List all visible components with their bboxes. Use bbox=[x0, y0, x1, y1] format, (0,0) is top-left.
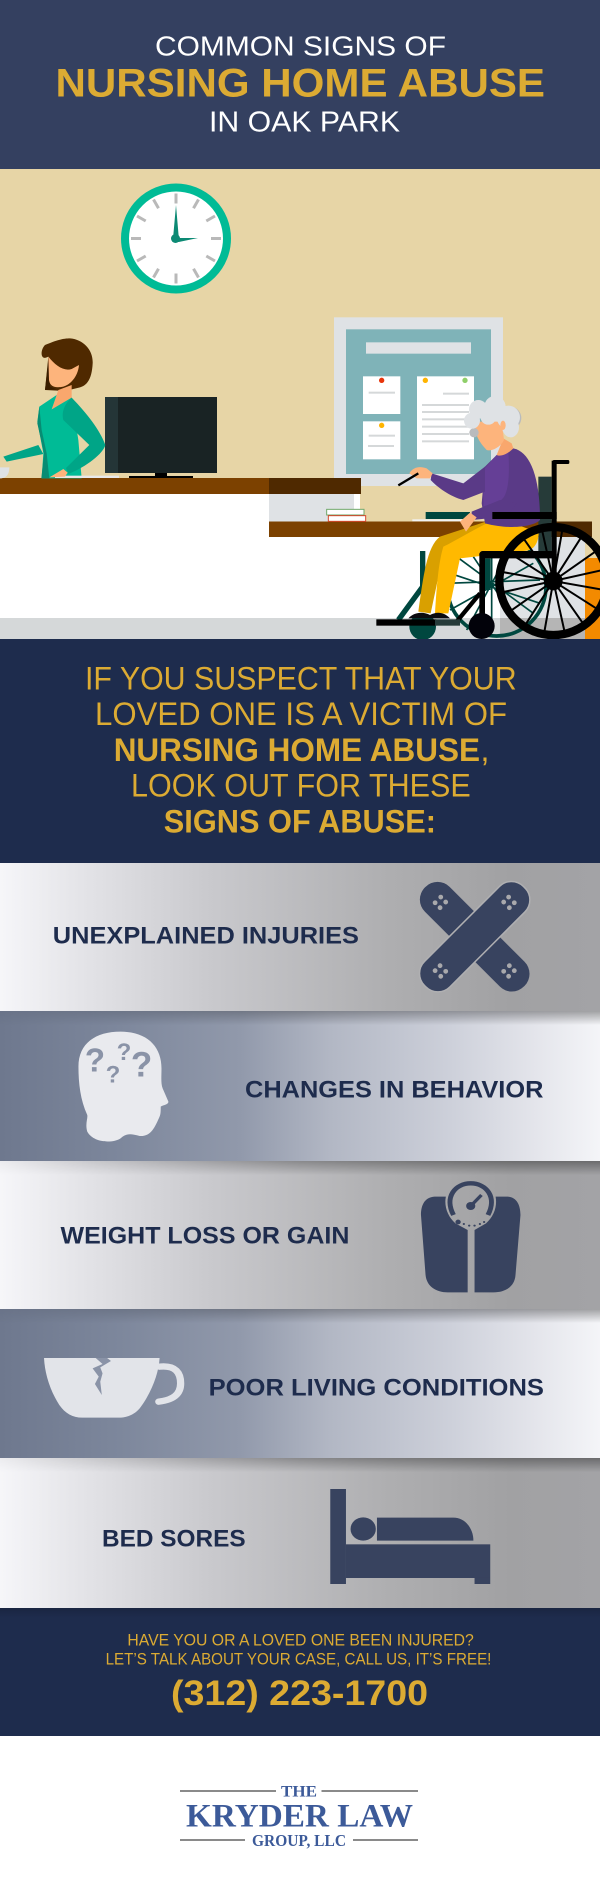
logo: the kryder law group: GROUP, LLC bbox=[252, 1831, 346, 1850]
wheelchair front frame and wheels bbox=[376, 460, 600, 639]
intro text: LOVED ONE IS A VICTIM OF bbox=[95, 696, 507, 732]
call to action text: HAVE YOU OR A LOVED ONE BEEN INJURED? bbox=[127, 1631, 474, 1649]
icon: head with question marks: ? bbox=[131, 1046, 152, 1085]
intro text: LOOK OUT FOR THESE bbox=[131, 768, 471, 804]
intro text: IF YOU SUSPECT THAT YOUR bbox=[85, 660, 517, 696]
books bbox=[327, 509, 366, 521]
icon: crossed bandages bbox=[412, 874, 537, 999]
sign 4: poor living conditions: POOR LIVING CONDITIONS bbox=[209, 1375, 544, 1402]
icon: head with question marks bbox=[78, 1032, 168, 1142]
header banner bbox=[0, 0, 600, 169]
title line: nursing home abuse: NURSING HOME ABUSE bbox=[56, 62, 545, 106]
sign 5: bed sores: BED SORES bbox=[102, 1526, 246, 1553]
icon: head with question marks: ? bbox=[85, 1042, 105, 1079]
sign 3: weight loss or gain bbox=[0, 1161, 600, 1309]
monitor bbox=[105, 397, 217, 478]
receptionist bbox=[0, 338, 119, 478]
logo: the kryder law group: THE bbox=[281, 1784, 317, 1801]
intro text: SIGNS OF ABUSE: bbox=[164, 804, 436, 840]
intro text: NURSING HOME ABUSE bbox=[114, 732, 480, 768]
icon: head with question marks: ? bbox=[117, 1039, 131, 1066]
sign 1: unexplained injuries bbox=[0, 863, 600, 1011]
intro text: , bbox=[480, 732, 489, 768]
logo: the kryder law group: KRYDER LAW bbox=[186, 1799, 413, 1835]
logo: the kryder law group bbox=[180, 1784, 418, 1850]
sign 3: weight loss or gain: WEIGHT LOSS OR GAIN bbox=[60, 1222, 349, 1249]
icon: person in bed bbox=[330, 1489, 490, 1584]
sign 4: poor living conditions bbox=[0, 1309, 600, 1458]
clock icon bbox=[125, 188, 227, 290]
intro text bbox=[85, 660, 517, 840]
title line: common signs of: COMMON SIGNS OF bbox=[155, 30, 446, 61]
icon: cracked cup bbox=[44, 1358, 181, 1418]
title line: in oak park: IN OAK PARK bbox=[209, 107, 401, 139]
sign 5: bed sores bbox=[0, 1458, 600, 1608]
notice board bbox=[334, 317, 503, 486]
sign 1: unexplained injuries: UNEXPLAINED INJURIES bbox=[53, 922, 359, 949]
sign 2: changes in behavior: CHANGES IN BEHAVIOR bbox=[245, 1077, 544, 1104]
call to action panel: LET’S TALK ABOUT YOUR CASE, CALL US, IT’S FREE! bbox=[106, 1650, 491, 1668]
seated woman bbox=[398, 396, 540, 618]
phone number: (312) 223-1700 bbox=[171, 1674, 428, 1713]
icon: head with question marks: ? bbox=[106, 1062, 120, 1089]
icon: bathroom scale bbox=[421, 1183, 520, 1292]
wheelchair rear frame bbox=[398, 537, 546, 636]
reception desk bbox=[0, 478, 600, 639]
call to action panel bbox=[0, 1608, 600, 1736]
floor bbox=[0, 618, 600, 639]
illustration: nursing home reception bbox=[0, 169, 600, 640]
sign 2: changes in behavior bbox=[0, 1011, 600, 1161]
intro panel bbox=[0, 639, 600, 863]
wheelchair user and items on desk bbox=[327, 396, 600, 640]
